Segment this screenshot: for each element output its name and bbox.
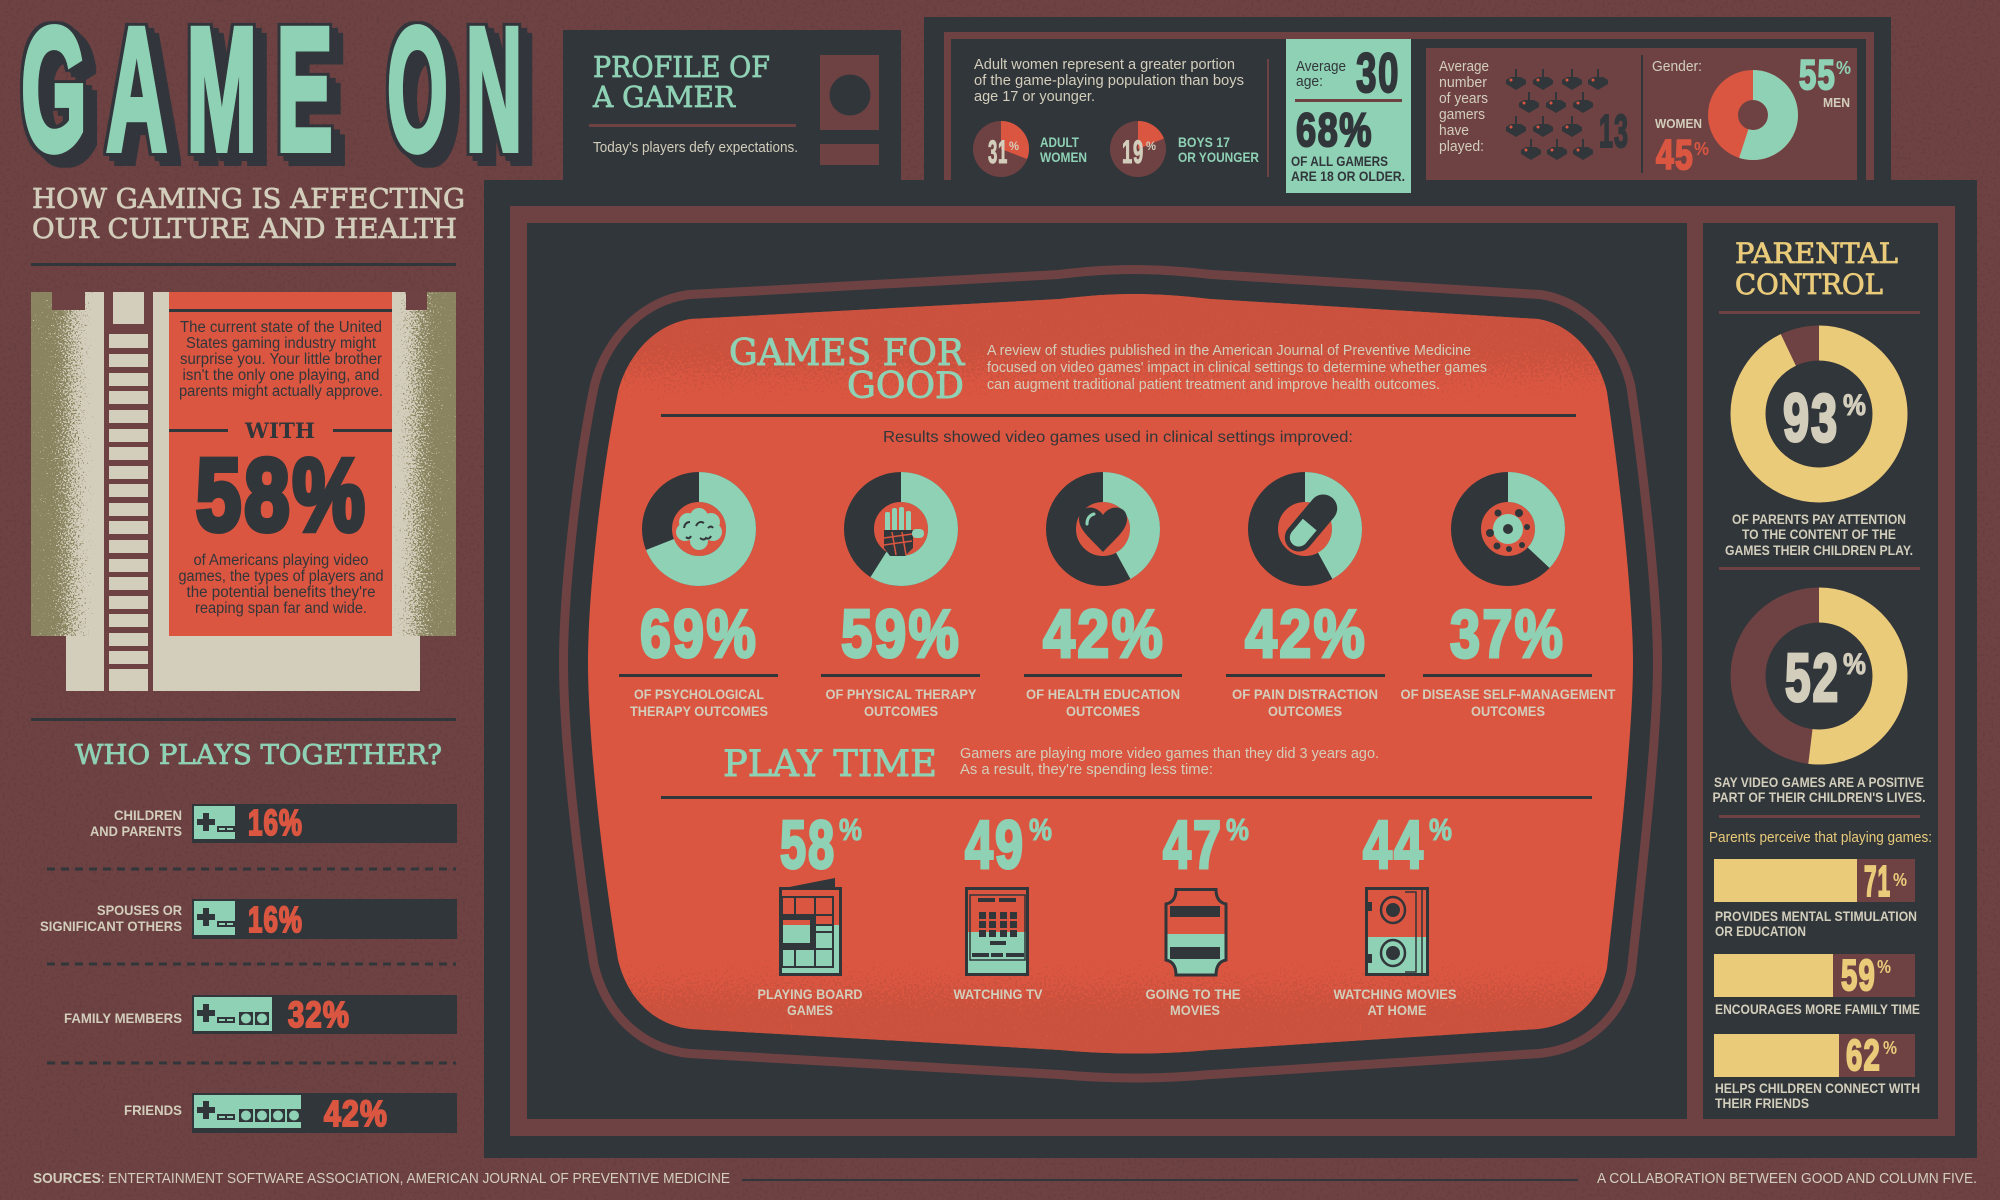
number: 30: 30 bbox=[1356, 41, 1400, 104]
stat: watching movies at home 44% bbox=[1334, 807, 1456, 1018]
bar: connect with friends 62%: % bbox=[1883, 1038, 1897, 1058]
bar: mental stimulation 71% bbox=[1714, 857, 1917, 939]
years played label: gamers bbox=[1439, 106, 1485, 123]
bar: family time 59%: % bbox=[1877, 957, 1891, 977]
row: friends: FRIENDS bbox=[124, 1102, 182, 1118]
panel: top statistics bbox=[924, 17, 1891, 193]
icon: tv remote bbox=[965, 888, 1029, 976]
bar: connect with friends 62%: 62 bbox=[1846, 1031, 1881, 1080]
parents perceive subtitle: Parents perceive that playing games: bbox=[1709, 830, 1932, 846]
donut: gender bbox=[1723, 85, 1783, 145]
footer: sources bbox=[33, 1170, 1977, 1187]
icon: vcr player bbox=[1365, 888, 1429, 976]
stat: health education 42%: OUTCOMES bbox=[1066, 703, 1140, 719]
row: family members bbox=[64, 994, 457, 1035]
icon: bandaged hand bbox=[884, 507, 924, 556]
icon: virus bbox=[1486, 509, 1530, 552]
stat: psychological therapy 69%: THERAPY OUTCOMES bbox=[630, 703, 768, 719]
games for good intro: A review of studies published in the American Journal of Preventive Medicine bbox=[987, 342, 1471, 359]
years played label: of years bbox=[1439, 90, 1488, 107]
intro text: isn't the only one playing, and bbox=[182, 367, 380, 384]
with divider bbox=[169, 418, 392, 443]
stat: 55% men: 55 bbox=[1799, 51, 1836, 98]
label: boys 17 or younger: OR YOUNGER bbox=[1178, 149, 1259, 165]
stat: watching tv 49%: 49 bbox=[965, 807, 1025, 883]
women versus boys text: Adult women represent a greater portion bbox=[974, 56, 1235, 73]
heading: parental control: CONTROL bbox=[1735, 268, 1883, 301]
row: children and parents: AND PARENTS bbox=[90, 823, 182, 839]
stat: board games 58% bbox=[758, 807, 863, 1018]
label: parents pay attention: OF PARENTS PAY ATTENTION bbox=[1732, 512, 1906, 527]
bar: mental stimulation 71%: OR EDUCATION bbox=[1715, 923, 1806, 939]
label: of all gamers: ARE 18 OR OLDER. bbox=[1291, 168, 1405, 184]
row: children and parents: CHILDREN bbox=[114, 807, 182, 823]
results subtitle: Results showed video games used in clinical settings improved: bbox=[883, 429, 1353, 446]
women versus boys text bbox=[974, 56, 1244, 105]
stat: watching tv 49% bbox=[954, 807, 1053, 1002]
label: of all gamers: OF ALL GAMERS bbox=[1291, 153, 1388, 169]
years played label: played: bbox=[1439, 138, 1484, 155]
texture: olive stipple bbox=[31, 292, 456, 636]
stat: pain distraction 42%: OUTCOMES bbox=[1268, 703, 1342, 719]
icon: pill bbox=[1279, 489, 1343, 557]
icon: board game bbox=[779, 878, 842, 976]
stat: disease self-management 37% bbox=[1400, 487, 1616, 719]
label: parents pay attention: GAMES THEIR CHILDREN PLAY. bbox=[1725, 543, 1913, 558]
row: friends bbox=[124, 1093, 457, 1134]
connector ladder bbox=[104, 292, 153, 691]
heading: how gaming is affecting culture: OUR CULTURE AND HEALTH bbox=[32, 214, 457, 245]
panel: average age bbox=[1286, 39, 1411, 193]
stat: watching movies at home 44%: WATCHING MOVIES bbox=[1334, 986, 1456, 1002]
stat: going to the movies 47%: GOING TO THE bbox=[1146, 986, 1240, 1002]
label: positive part of lives: SAY VIDEO GAMES ARE A POSITIVE bbox=[1714, 775, 1924, 790]
heading: profile of a gamer: A GAMER bbox=[592, 80, 736, 114]
intro text: surprise you. Your little brother bbox=[180, 351, 382, 368]
intro text bbox=[179, 319, 383, 400]
pie: adult women 31% bbox=[973, 121, 1029, 177]
pie: adult women 31%: 31 bbox=[988, 134, 1008, 170]
with divider: WITH bbox=[244, 418, 315, 443]
stat: psychological therapy 69% bbox=[619, 487, 778, 719]
label: parents pay attention bbox=[1725, 512, 1913, 558]
panel: who plays together bbox=[31, 718, 457, 1134]
bar: family time 59% bbox=[1714, 951, 1920, 1017]
stat: watching movies at home 44%: % bbox=[1429, 812, 1453, 847]
years played label: Average bbox=[1439, 58, 1489, 75]
icon: cartridge slot bbox=[820, 55, 879, 165]
stat: watching tv 49%: % bbox=[1029, 812, 1053, 847]
heading: games for good bbox=[729, 333, 965, 407]
row: spouses: SPOUSES OR bbox=[97, 902, 182, 918]
bar: mental stimulation 71%: PROVIDES MENTAL STIMULATION bbox=[1715, 908, 1917, 924]
donut: 93%: % bbox=[1843, 389, 1867, 422]
heading: profile of a gamer: PROFILE OF bbox=[593, 50, 770, 84]
label: boys 17 or younger: BOYS 17 bbox=[1178, 134, 1230, 150]
icons: 13 joysticks bbox=[1506, 69, 1608, 160]
label: adult women: ADULT bbox=[1040, 134, 1079, 150]
heading: how gaming is affecting culture bbox=[32, 184, 465, 245]
play time intro: Gamers are playing more video games than they did 3 years ago. bbox=[960, 745, 1379, 762]
stat: health education 42% bbox=[1024, 487, 1182, 719]
stat: 45% women: WOMEN bbox=[1655, 116, 1702, 131]
donut: 52%: % bbox=[1843, 648, 1867, 681]
closing text: the potential benefits they're bbox=[186, 584, 376, 601]
average age label: Average bbox=[1296, 58, 1346, 75]
play time intro: As a result, they're spending less time: bbox=[960, 761, 1213, 778]
donut: 52%: 52 bbox=[1785, 640, 1840, 716]
panel: tv screen bbox=[560, 285, 1660, 1065]
icon: brain bbox=[676, 508, 722, 550]
label: positive part of lives bbox=[1712, 775, 1926, 805]
label: of all gamers bbox=[1291, 153, 1405, 184]
stat: board games 58%: 58 bbox=[780, 807, 836, 883]
number: 68%: 68% bbox=[1296, 103, 1373, 156]
donut: 93%: 93 bbox=[1783, 380, 1839, 456]
footer: sources: SOURCES: ENTERTAINMENT SOFTWARE ASSOCIATION, AMERICAN JOURNAL OF PREVENTIVE MEDICINE bbox=[33, 1170, 730, 1187]
stat: physical therapy 59%: 59% bbox=[841, 596, 961, 672]
heading: profile of a gamer bbox=[592, 50, 770, 114]
stat: going to the movies 47% bbox=[1146, 807, 1250, 1018]
bar: connect with friends 62%: HELPS CHILDREN CONNECT WITH bbox=[1715, 1080, 1920, 1096]
stat: disease self-management 37%: OUTCOMES bbox=[1471, 703, 1545, 719]
row: family members: 32% bbox=[288, 994, 350, 1035]
stat: pain distraction 42%: OF PAIN DISTRACTION bbox=[1232, 686, 1378, 702]
pie: boys 19%: 19 bbox=[1122, 134, 1144, 170]
intro text: States gaming industry might bbox=[186, 335, 377, 352]
bar: connect with friends 62% bbox=[1714, 1031, 1920, 1111]
stat: 45% women: 45 bbox=[1656, 131, 1694, 178]
heading: parental control bbox=[1735, 237, 1898, 301]
panel: main console frame bbox=[484, 180, 1977, 1158]
cartridge label bbox=[169, 292, 392, 636]
donut: 93% bbox=[1748, 343, 1890, 485]
stat: psychological therapy 69%: OF PSYCHOLOGICAL bbox=[634, 686, 764, 702]
intro text: The current state of the United bbox=[180, 319, 382, 336]
panel: profile of a gamer bbox=[563, 30, 901, 180]
heading: how gaming is affecting culture: HOW GAMING IS AFFECTING bbox=[32, 184, 465, 215]
number: 58%: 58% bbox=[196, 438, 368, 552]
stat: physical therapy 59%: OUTCOMES bbox=[864, 703, 938, 719]
panel: nes cartridge bbox=[31, 292, 456, 691]
stat: 55% men: % bbox=[1836, 58, 1851, 78]
row: family members: FAMILY MEMBERS bbox=[64, 1010, 182, 1026]
label: positive part of lives: PART OF THEIR CHILDREN'S LIVES. bbox=[1712, 790, 1926, 805]
bar: connect with friends 62%: THEIR FRIENDS bbox=[1715, 1095, 1809, 1111]
stat: board games 58%: GAMES bbox=[787, 1002, 833, 1018]
stat: pain distraction 42%: 42% bbox=[1245, 596, 1367, 672]
stat: disease self-management 37%: OF DISEASE SELF-MANAGEMENT bbox=[1400, 686, 1616, 702]
row: friends: 42% bbox=[324, 1093, 388, 1134]
closing text: reaping span far and wide. bbox=[195, 600, 367, 617]
panel: years and gender bbox=[1426, 48, 1857, 180]
heading: games for good: GAMES FOR bbox=[729, 333, 965, 374]
games for good intro: focused on video games' impact in clinical settings to determine whether games bbox=[987, 359, 1487, 376]
average age label: age: bbox=[1296, 73, 1323, 90]
label: adult women: WOMEN bbox=[1040, 149, 1087, 165]
row: spouses: SIGNIFICANT OTHERS bbox=[40, 918, 182, 934]
stat: psychological therapy 69%: 69% bbox=[640, 596, 758, 672]
stat: physical therapy 59%: OF PHYSICAL THERAPY bbox=[826, 686, 977, 702]
profile subtitle: Today's players defy expectations. bbox=[593, 139, 798, 156]
stat: 45% women: % bbox=[1694, 139, 1709, 159]
heading: play time: PLAY TIME bbox=[723, 744, 937, 785]
pie: boys 19%: % bbox=[1146, 139, 1156, 153]
stat: watching tv 49%: WATCHING TV bbox=[954, 986, 1043, 1002]
row: children and parents: 16% bbox=[248, 802, 303, 843]
row: spouses: 16% bbox=[248, 899, 303, 940]
bar: family time 59%: 59 bbox=[1841, 951, 1876, 1000]
stat: pain distraction 42% bbox=[1226, 487, 1385, 719]
games for good intro: can augment traditional patient treatment and improve health outcomes. bbox=[987, 376, 1440, 393]
women versus boys text: of the game-playing population than boys bbox=[974, 72, 1244, 89]
heading: parental control: PARENTAL bbox=[1735, 237, 1898, 270]
label: parents pay attention: TO THE CONTENT OF THE bbox=[1742, 527, 1896, 542]
stat: watching movies at home 44%: AT HOME bbox=[1368, 1002, 1426, 1018]
stat: going to the movies 47%: MOVIES bbox=[1170, 1002, 1220, 1018]
icon: ticket bbox=[1166, 890, 1226, 975]
pie: boys 19% bbox=[1110, 121, 1166, 177]
closing text: games, the types of players and bbox=[178, 568, 384, 585]
icon: heart bbox=[1079, 508, 1127, 552]
years played label: have bbox=[1439, 122, 1469, 139]
intro text: parents might actually approve. bbox=[179, 383, 383, 400]
gender label: Gender: bbox=[1652, 58, 1702, 75]
panel: parental control bbox=[1709, 237, 1932, 1111]
stat: health education 42%: OF HEALTH EDUCATION bbox=[1026, 686, 1180, 702]
stat: board games 58%: PLAYING BOARD bbox=[758, 986, 862, 1002]
row: children and parents bbox=[90, 802, 457, 843]
stat: board games 58%: % bbox=[839, 812, 863, 847]
stat: going to the movies 47%: 47 bbox=[1163, 807, 1223, 883]
women versus boys text: age 17 or younger. bbox=[974, 88, 1095, 105]
play time intro bbox=[960, 745, 1379, 778]
bar: family time 59%: ENCOURAGES MORE FAMILY TIME bbox=[1715, 1001, 1920, 1017]
stat: disease self-management 37%: 37% bbox=[1450, 596, 1565, 672]
label: adult women bbox=[1040, 134, 1087, 165]
closing text: of Americans playing video bbox=[194, 552, 368, 569]
number: 13: 13 bbox=[1599, 105, 1629, 157]
pie: adult women 31%: % bbox=[1009, 139, 1019, 153]
footer: sources: A COLLABORATION BETWEEN GOOD AND COLUMN FIVE. bbox=[1597, 1170, 1977, 1187]
stat: watching movies at home 44%: 44 bbox=[1363, 807, 1425, 883]
average age label bbox=[1296, 58, 1346, 90]
stat: going to the movies 47%: % bbox=[1226, 812, 1250, 847]
games for good intro bbox=[987, 342, 1487, 393]
years played label: number bbox=[1439, 74, 1487, 91]
stat: health education 42%: 42% bbox=[1043, 596, 1165, 672]
donut: 52% bbox=[1748, 605, 1890, 747]
years played label bbox=[1439, 58, 1489, 155]
stat: physical therapy 59% bbox=[821, 487, 980, 719]
heading: games for good: GOOD bbox=[847, 366, 964, 407]
row: spouses bbox=[40, 899, 457, 940]
closing text bbox=[178, 552, 384, 617]
bar: mental stimulation 71%: 71 bbox=[1864, 857, 1891, 906]
stat: 55% men: MEN bbox=[1823, 95, 1850, 110]
label: boys 17 or younger bbox=[1178, 134, 1259, 165]
heading: who plays together: WHO PLAYS TOGETHER? bbox=[75, 740, 442, 771]
bar: mental stimulation 71%: % bbox=[1893, 870, 1907, 890]
